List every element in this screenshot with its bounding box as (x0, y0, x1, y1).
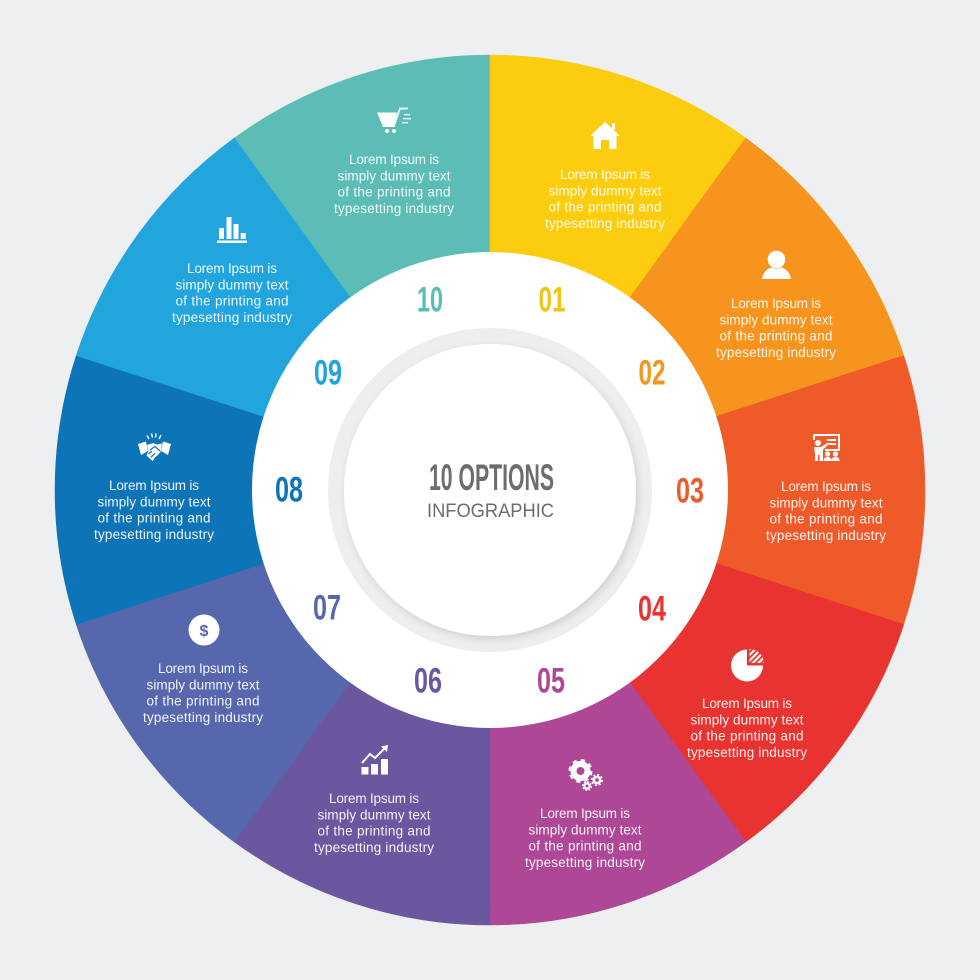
text: option 05 description: of the printing and (528, 839, 642, 854)
text: option 06 description: typesetting industry (314, 840, 434, 855)
text: option 07 description: of the printing and (146, 694, 260, 709)
text: option 08 description: simply dummy text (98, 494, 211, 509)
number 07: 07 (313, 588, 341, 628)
text: option 06 description (314, 791, 434, 855)
text: option 05 description (525, 806, 645, 870)
panel: option 04 (630, 564, 904, 842)
panel: central hub (252, 252, 728, 728)
text: option 03 description (766, 479, 886, 543)
icon: person (762, 251, 791, 279)
panel: option 10 (234, 55, 490, 298)
heading: 10 options: 10 OPTIONS (429, 457, 554, 498)
text: option 05 description: simply dummy text (528, 822, 642, 837)
icon: pie chart (731, 649, 764, 682)
text: option 09 description: of the printing and (176, 294, 288, 309)
icon: growth chart (362, 745, 388, 774)
text: option 05 description: Lorem Ipsum is (540, 806, 630, 821)
text: option 03 description: typesetting industry (766, 528, 886, 543)
panel: option 01 (490, 55, 746, 298)
number 06: 06 (414, 662, 442, 700)
icon: house (590, 122, 620, 149)
number labels (275, 280, 704, 700)
text: option 02 description (716, 296, 836, 360)
text: option 04 description: typesetting industry (687, 745, 807, 760)
text: option 09 description: Lorem Ipsum is (187, 261, 277, 276)
text: option 05 description: typesetting industry (525, 855, 645, 870)
number 03: 03 (676, 472, 704, 510)
text: option 10 description: Lorem Ipsum is (349, 152, 439, 167)
text: option 09 description: typesetting industry (172, 310, 292, 325)
icon: dollar coin (188, 614, 220, 646)
text: option 01 description: Lorem Ipsum is (560, 167, 650, 182)
text: option 01 description: of the printing and (548, 200, 662, 215)
number 09: 09 (314, 354, 342, 392)
icon: dollar coin: $ (200, 623, 209, 640)
text: option 06 description: Lorem Ipsum is (329, 791, 419, 806)
panel: option 09 (76, 138, 350, 416)
text: option 09 description (172, 261, 292, 325)
text: option 06 description: simply dummy text (318, 807, 431, 822)
text: option 04 description: simply dummy text (690, 712, 804, 727)
text: option 04 description: of the printing and (690, 729, 804, 744)
number 04: 04 (638, 590, 666, 628)
text: option 07 description (143, 661, 263, 725)
text: option 02 description: Lorem Ipsum is (731, 296, 821, 311)
panel: option 08 (55, 356, 264, 624)
text: option 08 description (94, 478, 214, 542)
text: option 09 description: simply dummy text (176, 277, 289, 292)
text: option 08 description: Lorem Ipsum is (109, 478, 199, 493)
text: option 03 description: simply dummy text (770, 495, 883, 510)
text: option 07 description: typesetting industry (143, 710, 263, 725)
text: option 07 description: simply dummy text (146, 677, 260, 692)
number 01: 01 (538, 280, 566, 320)
text: option 08 description: typesetting industry (94, 527, 214, 542)
panel: option 05 (490, 682, 746, 925)
text: option 07 description: Lorem Ipsum is (158, 661, 248, 676)
text: option 10 description: simply dummy text (338, 168, 451, 183)
text: option 10 description: of the printing and (338, 185, 450, 200)
number 02: 02 (638, 354, 666, 392)
icon: handshake (138, 434, 171, 461)
text: option 04 description: Lorem Ipsum is (702, 696, 792, 711)
text: option 01 description: typesetting industry (545, 216, 665, 231)
text: option 10 description (334, 152, 454, 216)
text: option 08 description: of the printing and (98, 511, 210, 526)
number 10: 10 (417, 280, 443, 320)
text: option 02 description: of the printing and (720, 329, 832, 344)
number 08: 08 (275, 470, 303, 510)
text: option 03 description: Lorem Ipsum is (781, 479, 871, 494)
icon: gears (570, 760, 602, 790)
panel: option 07 (76, 564, 350, 842)
panel: option 06 (234, 682, 490, 925)
subheading: infographic: INFOGRAPHIC (427, 500, 554, 522)
panel: option 03 (716, 356, 925, 624)
icon: presenter at board (813, 434, 840, 461)
text: option 02 description: simply dummy text (720, 312, 833, 327)
text: option 03 description: of the printing and (770, 512, 882, 527)
text: option 04 description (687, 696, 807, 760)
number 05: 05 (537, 662, 565, 700)
text: option 01 description: simply dummy text (548, 183, 662, 198)
icon: shopping cart (377, 108, 411, 133)
panel: option 02 (630, 138, 904, 416)
text: option 01 description (545, 167, 665, 231)
text: option 10 description: typesetting industry (334, 201, 454, 216)
icon: bar chart (217, 217, 247, 243)
text: option 02 description: typesetting industry (716, 345, 836, 360)
text: option 06 description: of the printing and (318, 824, 430, 839)
